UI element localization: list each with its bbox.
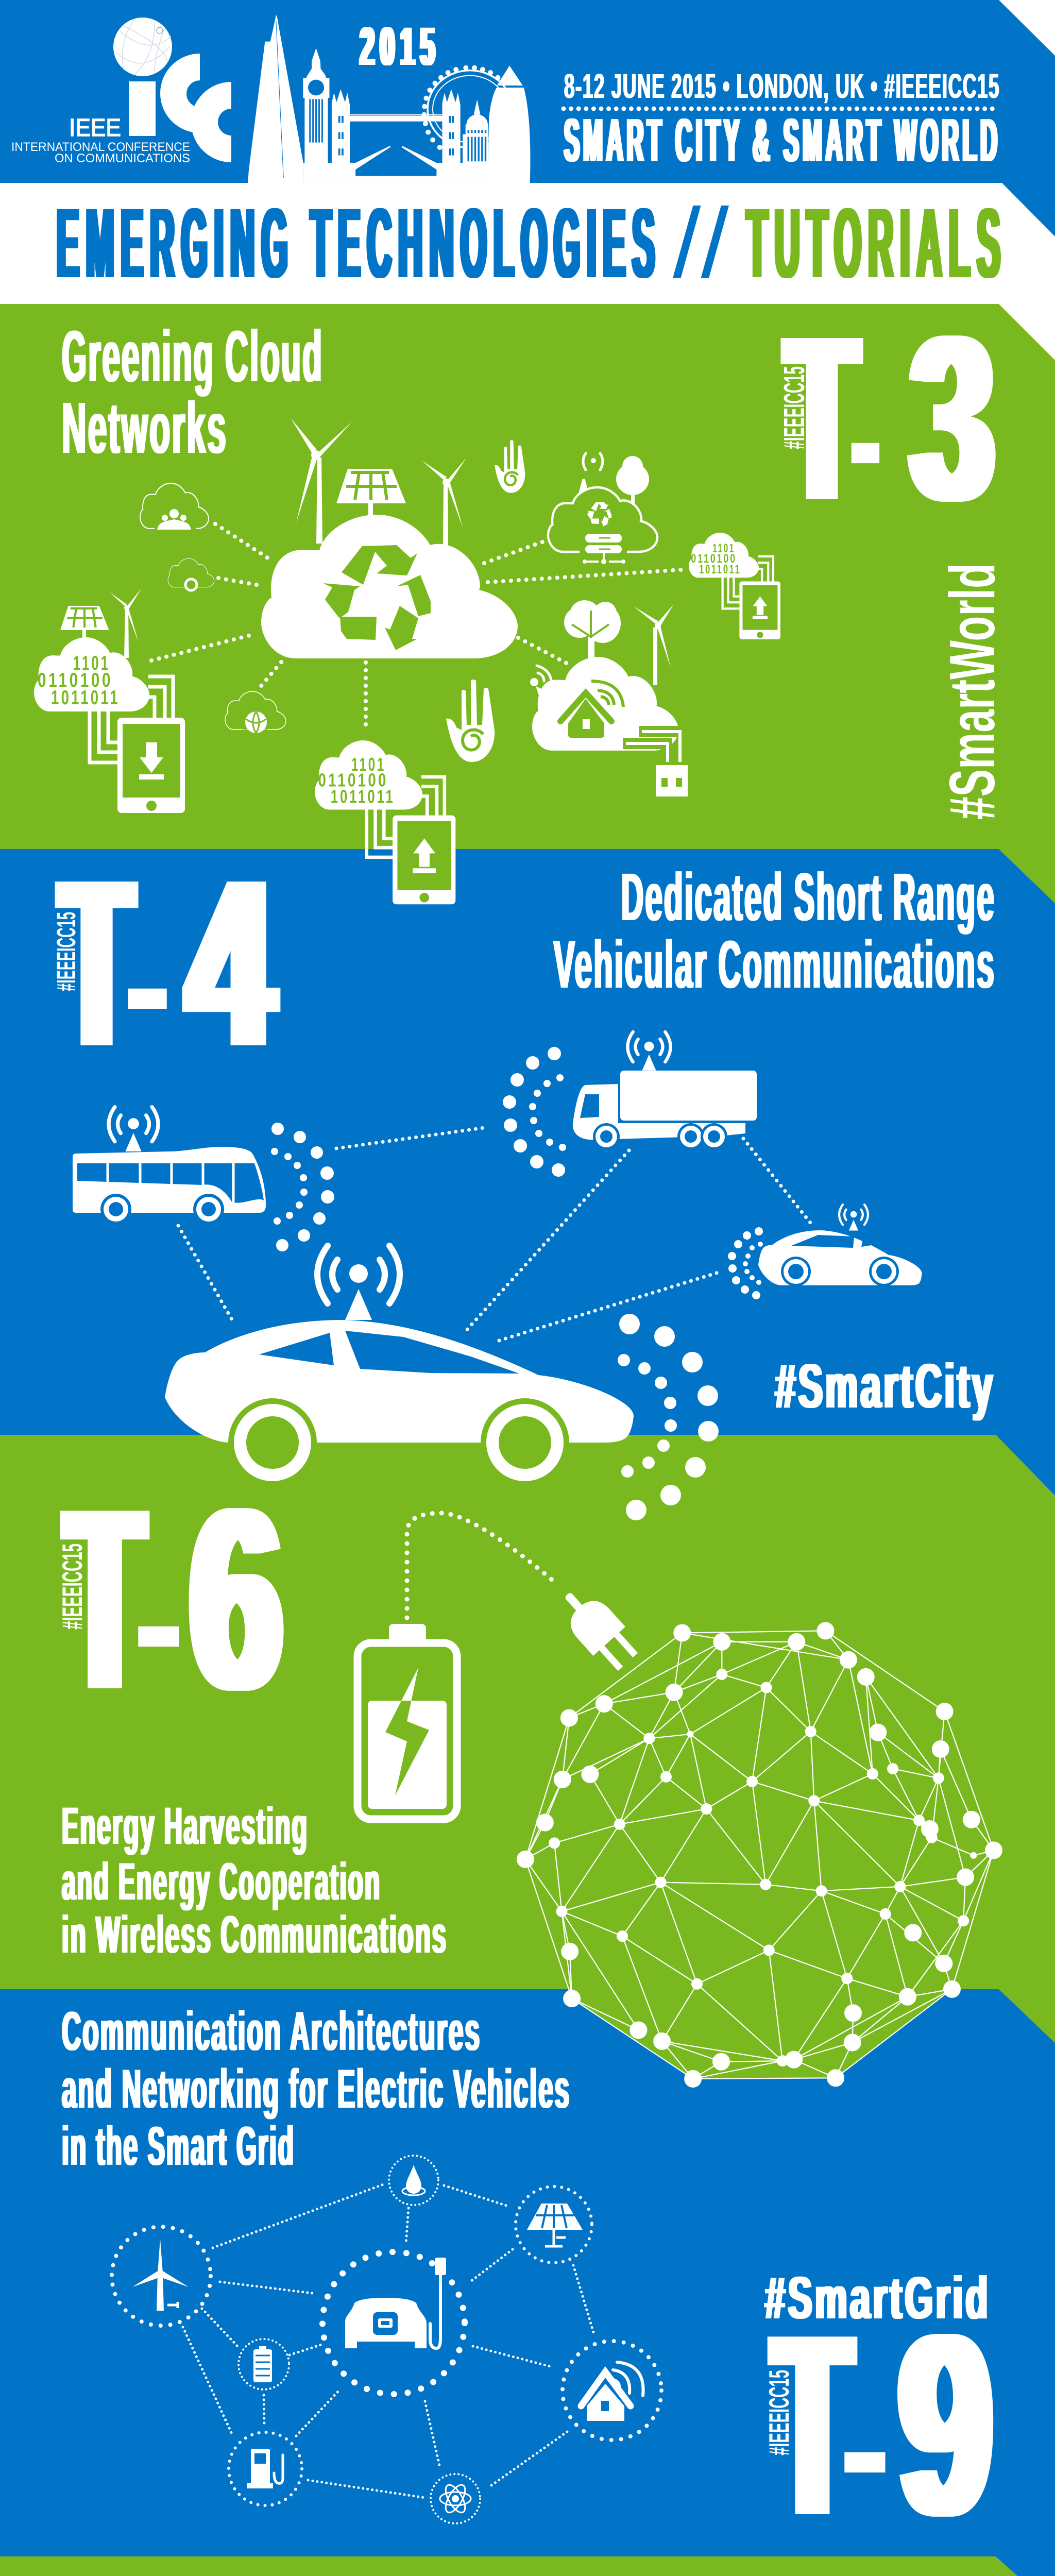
icon: central recycling cloud: [261, 515, 518, 658]
panel: conference header: 2015: [360, 16, 440, 77]
icon: dotted cable: [407, 1513, 558, 1618]
badge: T-6: -: [143, 1527, 175, 1717]
icon: London skyline: [248, 15, 530, 183]
badge: T-6: 6: [191, 1455, 281, 1743]
badge: T-4: -: [132, 889, 163, 1079]
signal dots: small car: [728, 1227, 763, 1299]
badge: T-4: 4: [188, 830, 275, 1096]
icon: data cloud and phone, bottom: [315, 740, 455, 904]
icon: hands: [446, 440, 525, 762]
node: battery: [239, 2339, 289, 2389]
node: electric car: [322, 2252, 465, 2394]
icon: small cloud: [168, 558, 214, 590]
icon: data cloud and phone, left: [34, 637, 185, 813]
node: water drop: [389, 2156, 438, 2205]
hashtag: IEEEICC15 vertical: #IEEEICC15: [56, 1544, 88, 1630]
icon: globe cloud: [225, 691, 286, 733]
signal dots: bus: [271, 1123, 334, 1251]
signal dots: truck: [503, 1047, 566, 1177]
icon: data cloud and phone, left: 1101: [73, 652, 110, 674]
hashtag: IEEEICC15 vertical: #IEEEICC15: [52, 912, 81, 991]
icon: data cloud and phone, right: 1101: [712, 542, 735, 555]
icon: small car: [758, 1205, 922, 1286]
panel: T-6 Energy Harvesting: in Wireless Communications: [62, 1905, 448, 1964]
panel: T-3 Greening Cloud Networks: Greening Cloud: [62, 315, 324, 397]
node: smart home: [563, 2341, 661, 2440]
panel: T-9 Smart Grid: [0, 1989, 1055, 2576]
hashtag: IEEEICC15 vertical: #IEEEICC15: [763, 2370, 795, 2455]
connectors: vehicle links: [178, 1127, 814, 1341]
badge: T-3: 3: [911, 287, 993, 549]
panel: T-11 Towards 5G: [0, 2546, 1055, 2576]
heading: T-6 title: and Energy Cooperation: [62, 1852, 381, 1911]
icon: truck: [573, 1032, 757, 1150]
heading: T-6 title: Energy Harvesting: [62, 1797, 309, 1855]
badge: T-9: -: [849, 2352, 881, 2543]
heading: T-4 title: [554, 859, 996, 1002]
panel: title banner: [0, 183, 1055, 360]
panel: conference header: [0, 0, 1055, 236]
dotted divider: [564, 106, 999, 111]
signal dots: main car: [618, 1314, 719, 1520]
heading: T-3 title: [62, 315, 324, 468]
icon: data cloud and phone, bottom: 1101: [351, 754, 386, 775]
connectors: cloud links: [151, 524, 688, 731]
badge: T-3: -: [857, 343, 874, 533]
badge: T-6: T: [67, 1455, 143, 1743]
node: solar panel: [516, 2187, 592, 2263]
node: wind power: [112, 2227, 211, 2326]
heading: T-9 title: Communication Architectures: [62, 2000, 481, 2062]
icon: power plug: [551, 1580, 644, 1676]
icon: data cloud and phone, bottom: 0110100: [318, 770, 388, 791]
separator: double slash: //: [673, 188, 729, 298]
heading: T-9 title: in the Smart Grid: [62, 2115, 295, 2177]
icon: data cloud and phone, right: 1011011: [699, 563, 741, 577]
icon: smart home cloud: [530, 600, 688, 796]
logo: IEEE ICC: INTERNATIONAL CONFERENCE: [11, 140, 190, 154]
badge: T-11: [792, 2546, 990, 2576]
hashtag: SmartWorld vertical: #SmartWorld: [937, 563, 1008, 820]
logo: IEEE ICC: ON COMMUNICATIONS: [55, 151, 190, 165]
icon: main car: [165, 1246, 634, 1487]
icon: wind turbines: [109, 418, 674, 685]
badge: T-9: T: [774, 2281, 850, 2569]
icon: recycling server cloud with tower and tree: [548, 453, 657, 564]
panel: T-3 Greening Cloud Networks: #IEEEICC15: [778, 366, 811, 449]
panel: T-6 Energy Harvesting: [0, 1435, 1055, 2079]
logo: IEEE ICC: IEEE: [69, 114, 121, 142]
icon: data cloud and phone, left: 1011011: [51, 687, 120, 709]
badge: T-4: T: [61, 830, 132, 1096]
heading: T-3 title: Networks: [62, 387, 228, 468]
node: atom: [431, 2474, 480, 2523]
icon: battery: [358, 1624, 457, 1819]
badge: T-3: T: [787, 287, 857, 549]
network connectors: [183, 2184, 593, 2498]
badge: T-4: [61, 830, 275, 1096]
panel: T-4 Vehicular Communications: [0, 830, 1055, 1520]
heading: T-6 title: [62, 1797, 448, 1964]
icon: solar panels: [60, 469, 406, 639]
heading: T-9 title: [62, 2000, 571, 2177]
icon: people cloud: [140, 483, 209, 531]
icon: data cloud and phone, left: 0110100: [38, 669, 113, 691]
logo: IEEE ICC: [11, 18, 231, 165]
icon: data cloud and phone, right: [689, 533, 780, 639]
node: charging station: [229, 2432, 302, 2505]
panel: T-3 Greening Cloud Networks: [0, 287, 1055, 904]
badge: T-3: [787, 287, 993, 549]
badge: T-9: 9: [900, 2281, 991, 2569]
chart: network sphere: [525, 1631, 994, 2079]
icon: data cloud and phone, bottom: 1011011: [331, 786, 395, 807]
icon: bus: [73, 1107, 266, 1225]
icon: data cloud and phone, right: 0110100: [691, 552, 737, 566]
